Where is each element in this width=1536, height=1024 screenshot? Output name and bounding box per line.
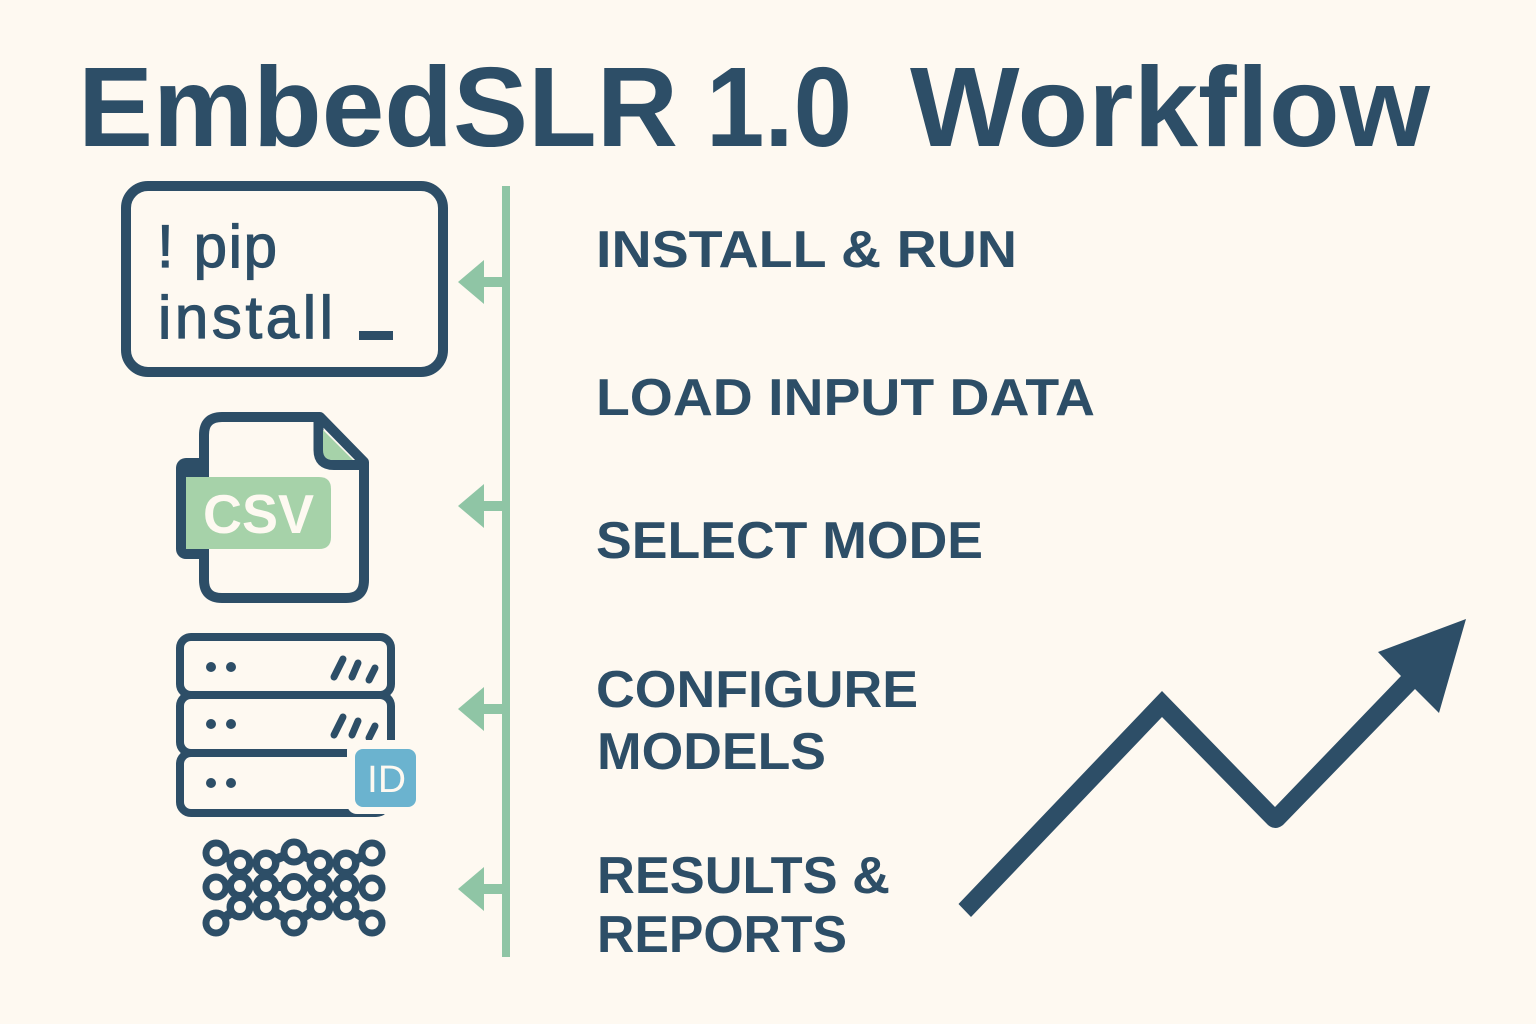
step labels <box>596 221 1095 964</box>
arrow: install <box>458 260 503 304</box>
icon: database stack with ID badge <box>180 637 427 814</box>
icon: terminal install: ! pip <box>157 213 277 280</box>
arrow: load data <box>458 484 503 528</box>
label: configure models: CONFIGURE <box>596 661 918 719</box>
label: results and reports: RESULTS & <box>597 847 890 905</box>
icon: CSV file: CSV <box>203 483 314 545</box>
title <box>78 44 1431 170</box>
timeline with arrows <box>458 186 510 957</box>
arrow: models <box>458 687 503 731</box>
icon: database stack with ID badge: ID <box>367 759 406 801</box>
title: 1.0 <box>706 44 852 170</box>
title: Workflow <box>910 44 1431 170</box>
label: results and reports: REPORTS <box>597 906 847 964</box>
arrow: results <box>458 867 503 911</box>
label: configure models <box>596 661 918 781</box>
icon: neural network <box>202 838 386 936</box>
icon: terminal install <box>126 186 443 372</box>
label: results and reports <box>597 847 890 964</box>
label: load input data: LOAD INPUT DATA <box>596 369 1095 427</box>
title: EmbedSLR <box>78 44 678 170</box>
icon: terminal install: install <box>158 284 333 351</box>
label: select mode: SELECT MODE <box>596 512 983 570</box>
label: configure models: MODELS <box>597 723 826 781</box>
growth arrow <box>958 619 1466 917</box>
icon: CSV file <box>176 417 364 598</box>
label: install and run: INSTALL & RUN <box>596 221 1017 279</box>
